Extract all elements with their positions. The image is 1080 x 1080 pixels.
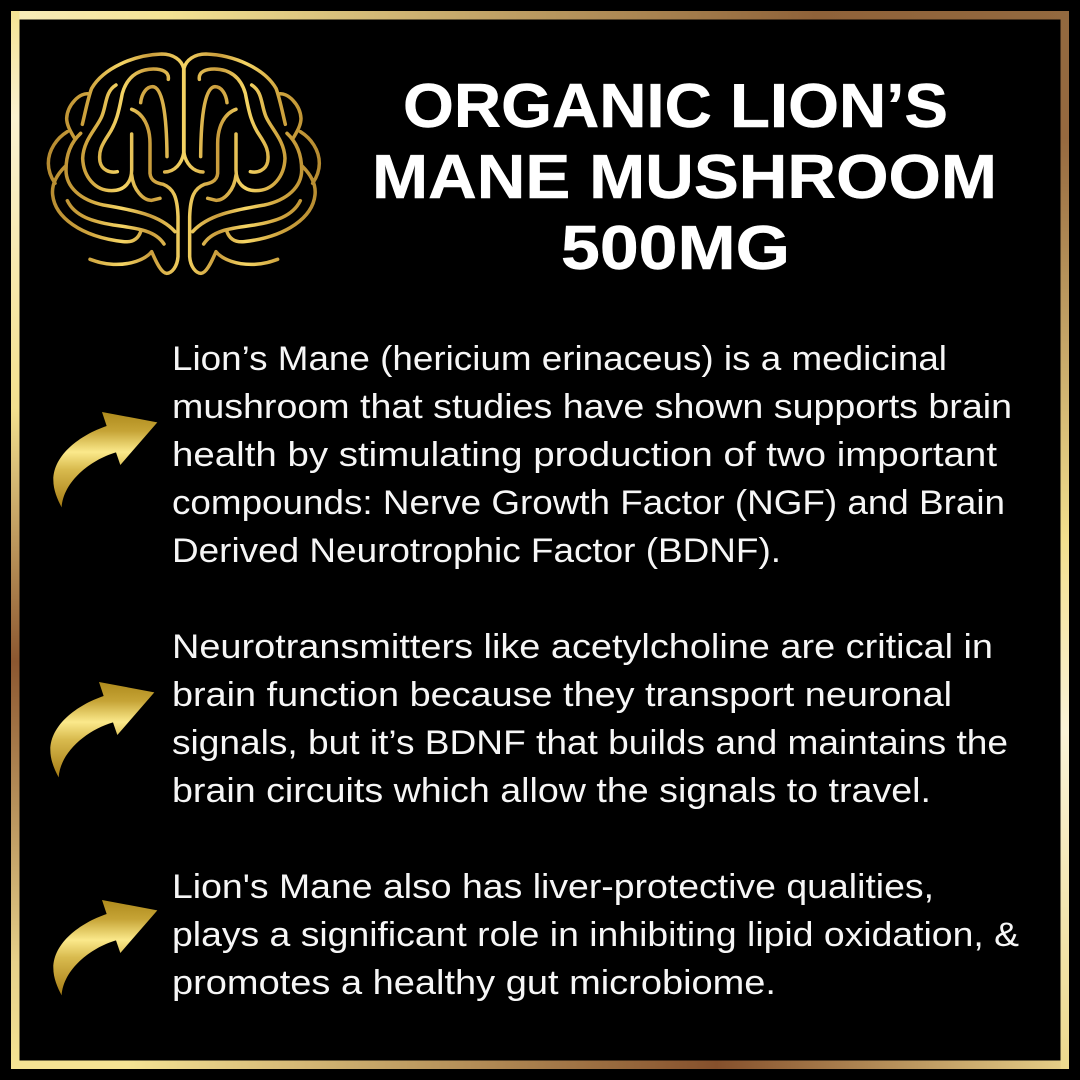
text block: liver and gut benefits: plays a significant role in inhibiting lipid oxidation, & [172, 916, 1019, 954]
text block: what Lion's Mane does: Lion’s Mane (hericium erinaceus) is a medicinal [172, 340, 947, 378]
text block: what Lion's Mane does: health by stimulating production of two important [172, 436, 997, 474]
title: 500MG [561, 214, 790, 283]
icon: arrow for first paragraph [53, 412, 157, 507]
text block: liver and gut benefits: Lion's Mane also has liver-protective qualities, [172, 868, 934, 906]
title [372, 72, 997, 283]
text block: neurotransmitters and BDNF: signals, but it’s BDNF that builds and maintains the [172, 724, 1008, 762]
title: ORGANIC LION’S [403, 72, 948, 141]
text block: liver and gut benefits [172, 868, 1019, 1002]
text block: neurotransmitters and BDNF: Neurotransmitters like acetylcholine are critical in [172, 628, 993, 666]
icon: arrow for second paragraph [50, 682, 154, 777]
text block: what Lion's Mane does: Derived Neurotrophic Factor (BDNF). [172, 532, 781, 570]
icon: gold line-art brain [48, 54, 319, 273]
text block: neurotransmitters and BDNF [172, 628, 1008, 810]
text block: what Lion's Mane does [172, 340, 1012, 570]
title: MANE MUSHROOM [372, 143, 997, 212]
text block: what Lion's Mane does: compounds: Nerve Growth Factor (NGF) and Brain [172, 484, 1005, 522]
text block: neurotransmitters and BDNF: brain function because they transport neuronal [172, 676, 952, 714]
text block: neurotransmitters and BDNF: brain circuits which allow the signals to travel. [172, 772, 931, 810]
icon: arrow for third paragraph [53, 900, 157, 995]
text block: what Lion's Mane does: mushroom that studies have shown supports brain [172, 388, 1012, 426]
text block: liver and gut benefits: promotes a healthy gut microbiome. [172, 964, 776, 1002]
